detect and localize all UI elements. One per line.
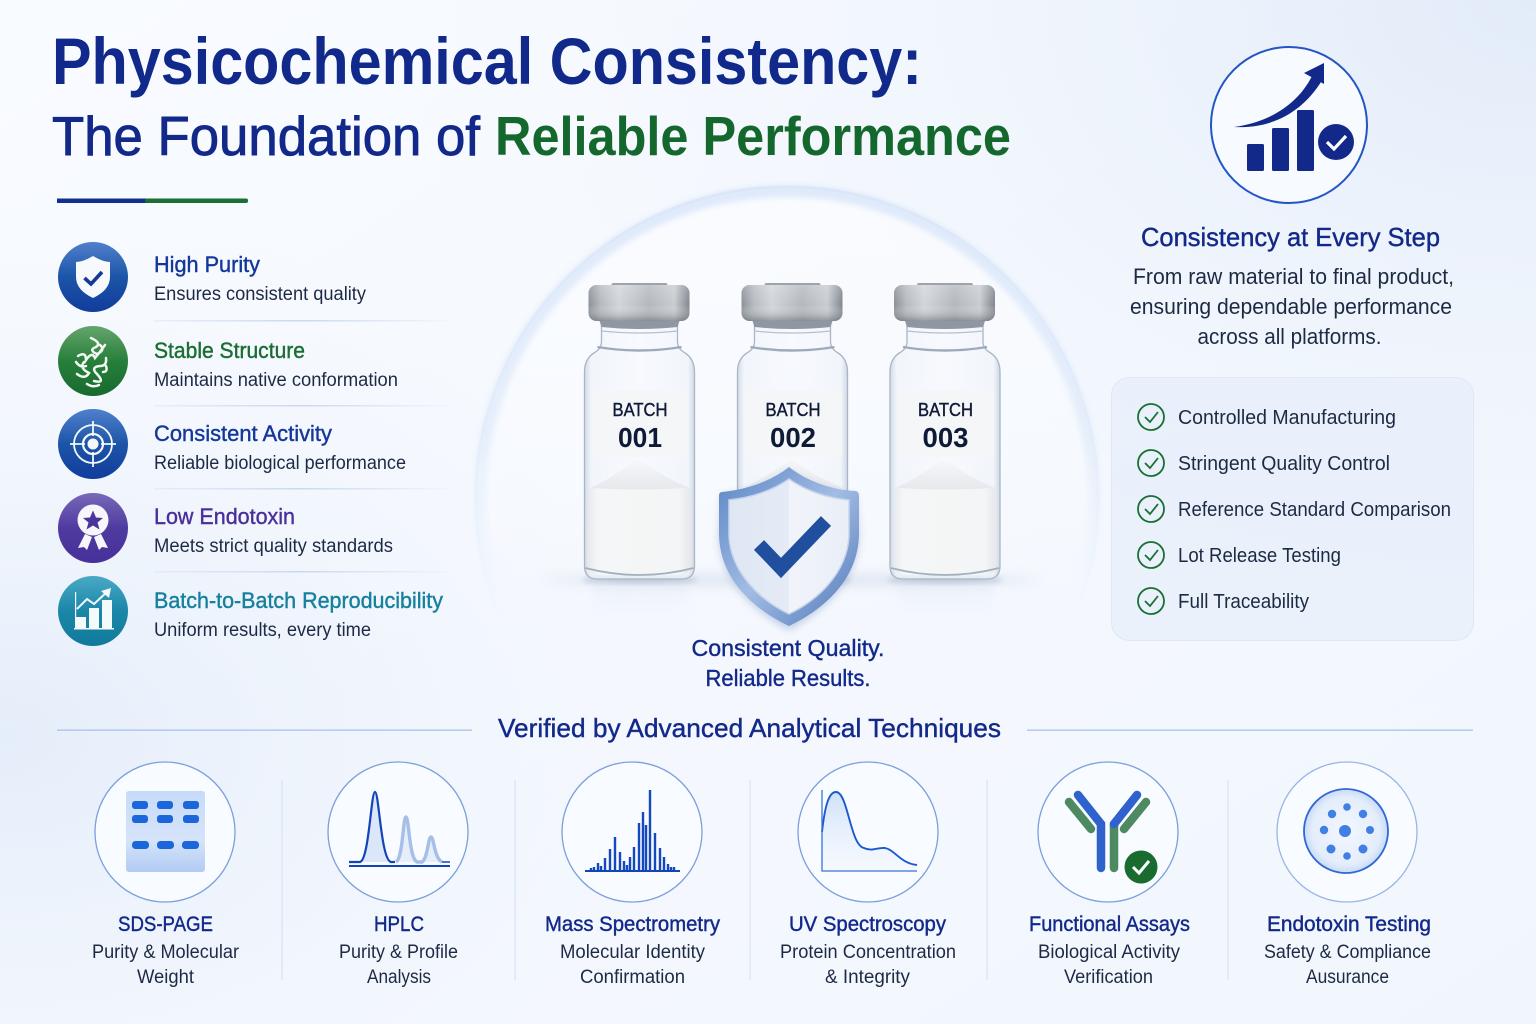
vial: batch 002	[738, 283, 848, 579]
technique: mass spectrometry: Mass Spectrometry	[545, 913, 720, 936]
halo behind vials	[476, 187, 1098, 809]
text block: consistency description: ensuring dependable performance	[1130, 294, 1452, 319]
attribute: stable structure: Stable Structure	[154, 338, 305, 363]
technique: endotoxin testing: Ausurance	[1306, 967, 1389, 988]
floor reflection	[540, 575, 1040, 628]
technique: functional assays: Biological Activity	[1038, 942, 1180, 963]
technique: endotoxin testing: Endotoxin Testing	[1267, 913, 1431, 936]
panel: process checklist	[1112, 378, 1474, 640]
technique: UV spectroscopy	[780, 762, 956, 988]
technique: HPLC	[328, 762, 468, 988]
technique: mass spectrometry: Confirmation	[580, 967, 685, 988]
vial: batch 001: 001	[618, 422, 662, 453]
technique: SDS-PAGE: SDS-PAGE	[118, 913, 213, 936]
vial: batch 001	[584, 283, 694, 579]
caption: consistent quality: Consistent Quality.	[692, 635, 884, 661]
vial: batch 001: BATCH	[612, 400, 668, 420]
panel: quality attributes	[58, 242, 448, 646]
technique: functional assays: Verification	[1064, 967, 1153, 988]
panel: process checklist: Controlled Manufacturing	[1178, 407, 1396, 429]
attribute: batch-to-batch reproducibility	[58, 576, 443, 646]
text block: consistency description: across all platforms.	[1198, 324, 1382, 349]
attribute: consistent activity	[58, 409, 406, 479]
vial: batch 003	[890, 283, 1000, 579]
technique: endotoxin testing: Safety & Compliance	[1264, 942, 1431, 963]
technique: mass spectrometry	[545, 762, 720, 988]
panel: process checklist: Lot Release Testing	[1178, 545, 1341, 567]
attribute: high purity: Ensures consistent quality	[154, 284, 366, 305]
title underline	[57, 198, 248, 203]
technique: mass spectrometry: Molecular Identity	[560, 942, 705, 963]
attribute: low endotoxin	[58, 493, 393, 563]
attribute: stable structure: Maintains native conformation	[154, 370, 398, 391]
title: Physicochemical Consistency:	[52, 24, 922, 98]
icon: shield with check	[719, 467, 859, 630]
technique: functional assays: Functional Assays	[1029, 913, 1190, 936]
panel: process checklist: Reference Standard Comparison	[1178, 499, 1451, 521]
technique: functional assays	[1029, 762, 1190, 988]
technique: UV spectroscopy: Protein Concentration	[780, 942, 956, 963]
title	[52, 24, 1011, 167]
technique: SDS-PAGE: Weight	[137, 967, 195, 988]
caption: consistent quality	[692, 635, 884, 691]
vial: batch 002: 002	[770, 422, 816, 453]
attribute: batch-to-batch reproducibility: Batch-to-Batch Reproducibility	[154, 588, 443, 613]
technique: UV spectroscopy: & Integrity	[825, 967, 910, 988]
attribute: high purity: High Purity	[154, 252, 260, 277]
heading: consistency at every step: Consistency at Every Step	[1141, 222, 1440, 252]
technique: HPLC: Purity & Profile	[339, 942, 458, 963]
attribute: consistent activity: Reliable biological performance	[154, 453, 406, 474]
technique: endotoxin testing	[1264, 762, 1431, 988]
text block: consistency description	[1130, 264, 1454, 349]
heading: verified by advanced analytical techniques: Verified by Advanced Analytical Techniques	[498, 713, 1001, 743]
text block: consistency description: From raw material to final product,	[1133, 264, 1454, 289]
attribute: batch-to-batch reproducibility: Uniform results, every time	[154, 620, 371, 641]
technique: UV spectroscopy: UV Spectroscopy	[789, 913, 946, 936]
technique: HPLC: HPLC	[374, 913, 424, 936]
attribute: low endotoxin: Meets strict quality standards	[154, 536, 393, 557]
vial: batch 002: BATCH	[766, 400, 820, 420]
technique: HPLC: Analysis	[367, 967, 431, 988]
attribute: low endotoxin: Low Endotoxin	[154, 504, 295, 529]
vial: batch 003: 003	[922, 422, 968, 453]
technique: SDS-PAGE	[92, 762, 240, 988]
icon: growth chart badge	[1211, 47, 1367, 203]
attribute: high purity	[58, 242, 366, 312]
title: The Foundation of	[52, 105, 481, 167]
title: Reliable Performance	[495, 105, 1011, 167]
vial: batch 003: BATCH	[918, 400, 973, 420]
technique: SDS-PAGE: Purity & Molecular	[92, 942, 240, 963]
panel: process checklist: Full Traceability	[1178, 591, 1309, 613]
caption: consistent quality: Reliable Results.	[706, 665, 870, 691]
attribute: stable structure	[58, 326, 398, 396]
panel: process checklist: Stringent Quality Control	[1178, 453, 1390, 475]
attribute: consistent activity: Consistent Activity	[154, 421, 332, 446]
